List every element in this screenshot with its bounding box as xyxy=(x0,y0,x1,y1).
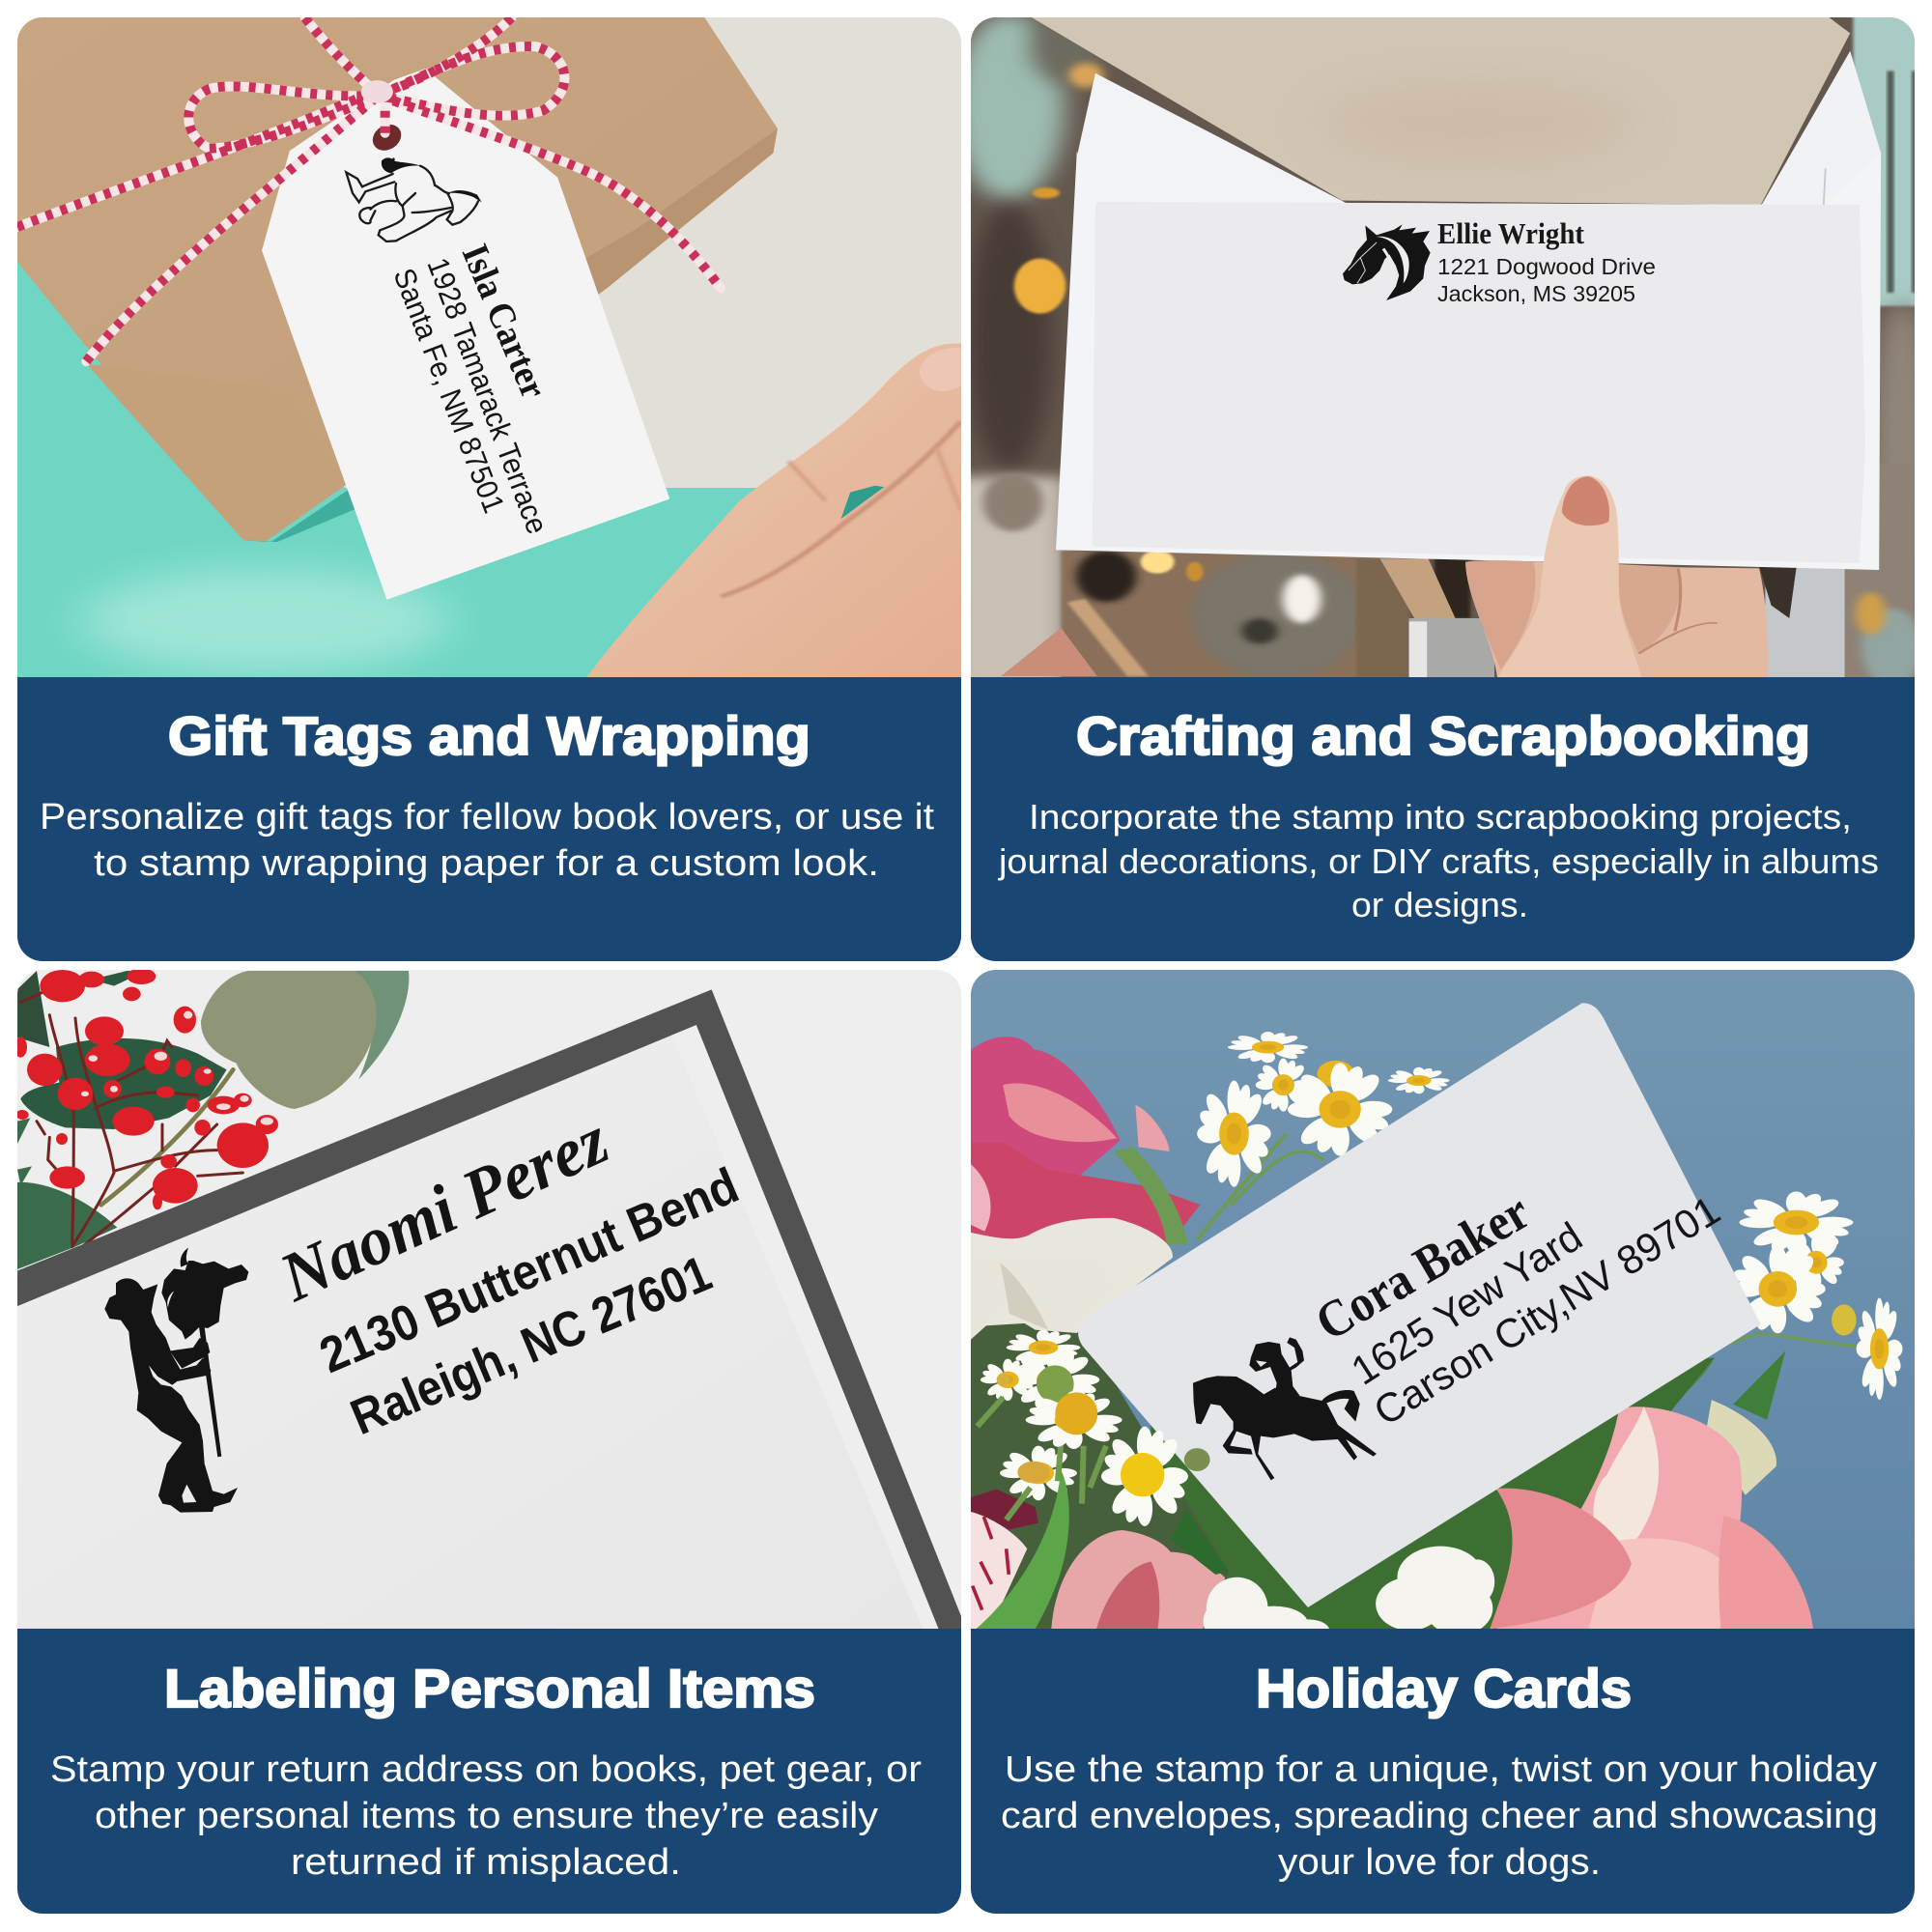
baby's breath xyxy=(1204,1547,1494,1641)
heading: crafting: Crafting and Scrapbooking xyxy=(1076,705,1810,766)
hand holding envelope xyxy=(1465,476,1768,678)
caption text: or designs. xyxy=(1351,885,1528,924)
envelope with insert xyxy=(1025,14,1881,570)
green leaf xyxy=(976,1470,1069,1630)
envelope back and flap xyxy=(1078,51,1881,209)
notebook xyxy=(0,989,971,1639)
plants xyxy=(14,968,409,1269)
gift box xyxy=(0,0,778,542)
caption text xyxy=(40,797,934,884)
photo: wrapped gift with tag xyxy=(0,0,985,692)
icon: cowboy silhouette xyxy=(104,1248,248,1513)
tag address text: Isla Carter xyxy=(454,239,554,404)
caption text xyxy=(998,797,1879,924)
caption text xyxy=(1001,1749,1878,1883)
photo: blurred background top xyxy=(953,0,1932,692)
photo: bouquet behind card xyxy=(966,956,1932,1648)
caption text: Stamp your return address on books, pet gear, or xyxy=(50,1749,922,1790)
photo: address card xyxy=(1078,1003,1761,1641)
photo: blurred background bottom xyxy=(947,464,1921,689)
notebook stamp text: 2130 Butternut Bend xyxy=(312,1157,747,1384)
bokeh lights xyxy=(1014,63,1103,314)
kraft insert card xyxy=(1025,14,1850,205)
daisies upper xyxy=(1197,1032,1450,1240)
tag address text: Santa Fe, NM 87501 xyxy=(386,264,511,518)
envelope address text: 1221 Dogwood Drive xyxy=(1437,254,1656,279)
hand xyxy=(582,343,985,683)
lower left flowers xyxy=(971,1256,1229,1633)
icon: horse head xyxy=(1343,224,1431,300)
notebook stamp text: Raleigh, NC 27601 xyxy=(343,1245,720,1446)
pink lilies xyxy=(1490,1400,1813,1629)
tag address text: 1928 Tamarack Terrace xyxy=(420,253,554,538)
icon: outline horse xyxy=(346,157,482,242)
caption text: your love for dogs. xyxy=(1278,1842,1601,1883)
caption text: to stamp wrapping paper for a custom look. xyxy=(94,843,879,884)
icon: horse and rider silhouette xyxy=(1193,1337,1377,1480)
striped lily xyxy=(971,1512,1027,1630)
panel: labeling personal items xyxy=(0,968,971,1914)
caption text xyxy=(50,1749,922,1883)
card address text: Cora Baker xyxy=(1306,1182,1539,1351)
notebook stamp text xyxy=(282,1128,740,1435)
gift tag xyxy=(262,69,669,600)
envelope address text xyxy=(1437,216,1656,306)
panel: gift tags and wrapping xyxy=(0,0,985,961)
notebook stamp text: Naomi Perez xyxy=(269,1101,619,1317)
photo background xyxy=(17,970,961,1646)
envelope front xyxy=(1056,151,1881,570)
notebook cover xyxy=(0,989,971,1639)
caption text: Incorporate the stamp into scrapbooking projects, xyxy=(1029,797,1852,837)
caption band xyxy=(17,677,961,961)
twine bow xyxy=(17,17,721,361)
caption text: returned if misplaced. xyxy=(291,1842,681,1883)
pink flowers left xyxy=(966,1037,1200,1244)
daisy over card xyxy=(1101,1427,1188,1526)
panel: crafting and scrapbooking xyxy=(947,0,1932,961)
caption text: journal decorations, or DIY crafts, especially in albums xyxy=(998,841,1879,881)
white flower xyxy=(966,1218,1173,1338)
caption text: Use the stamp for a unique, twist on your holiday xyxy=(1005,1749,1877,1790)
heading: labeling: Labeling Personal Items xyxy=(164,1658,815,1719)
heading: gift tags: Gift Tags and Wrapping xyxy=(168,705,810,766)
card address text: Carson City,NV 89701 xyxy=(1366,1187,1727,1435)
envelope address text: Jackson, MS 39205 xyxy=(1437,281,1635,306)
daisies right xyxy=(1718,1191,1902,1400)
card address text: 1625 Yew Yard xyxy=(1344,1213,1590,1394)
side daisies xyxy=(978,1330,1122,1520)
caption text: Personalize gift tags for fellow book lovers, or use it xyxy=(40,797,934,838)
heading: holiday cards: Holiday Cards xyxy=(1256,1658,1632,1719)
caption text: other personal items to ensure they’re easily xyxy=(95,1796,878,1836)
caption band xyxy=(17,1629,961,1914)
caption band xyxy=(971,677,1915,961)
notebook page xyxy=(0,1025,943,1639)
caption text: card envelopes, spreading cheer and showcasing xyxy=(1001,1796,1878,1836)
caption band xyxy=(971,1629,1915,1914)
maroon petal xyxy=(971,1490,1038,1529)
panel: holiday cards xyxy=(966,956,1932,1914)
pink petal xyxy=(1051,1530,1225,1630)
envelope address text: Ellie Wright xyxy=(1437,216,1585,250)
green leaves xyxy=(1151,1351,1785,1634)
dark leaf xyxy=(1171,1510,1229,1575)
